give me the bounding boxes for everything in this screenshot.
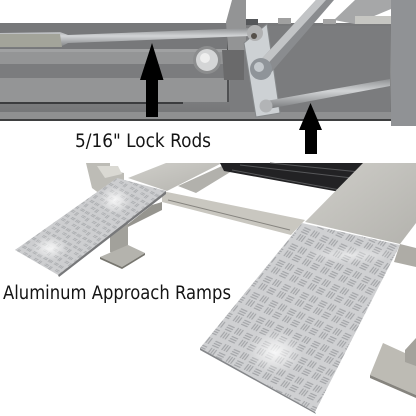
top right gusset [334,0,391,24]
main beam [0,23,392,121]
left deck [128,163,222,191]
lock rod: lower right [260,79,390,112]
right tail beam [394,244,416,267]
right deck [305,163,416,244]
photo: lock rods close-up [0,0,416,126]
rear cross member [178,166,232,193]
photo: lift deck and ramps [15,163,416,414]
far right column [391,0,416,126]
label: ramps: Aluminum Approach Ramps [3,283,231,304]
ramp: left [15,178,166,277]
right front post [370,338,416,398]
cross beam [162,191,305,235]
upright bracket [226,0,246,50]
lock rod: upper left [0,25,263,48]
sliding plate [0,23,228,102]
arrow: left lock rod [140,43,164,117]
bolt [193,46,221,74]
black rails [220,163,370,192]
link plate [244,24,280,117]
lock rod: diagonal [250,0,334,80]
arrow: right lock rod [299,103,322,154]
left post [86,163,124,194]
ramp: right [200,223,400,414]
label: lock rods: 5/16" Lock Rods [75,131,211,152]
left ramp support [100,202,162,269]
